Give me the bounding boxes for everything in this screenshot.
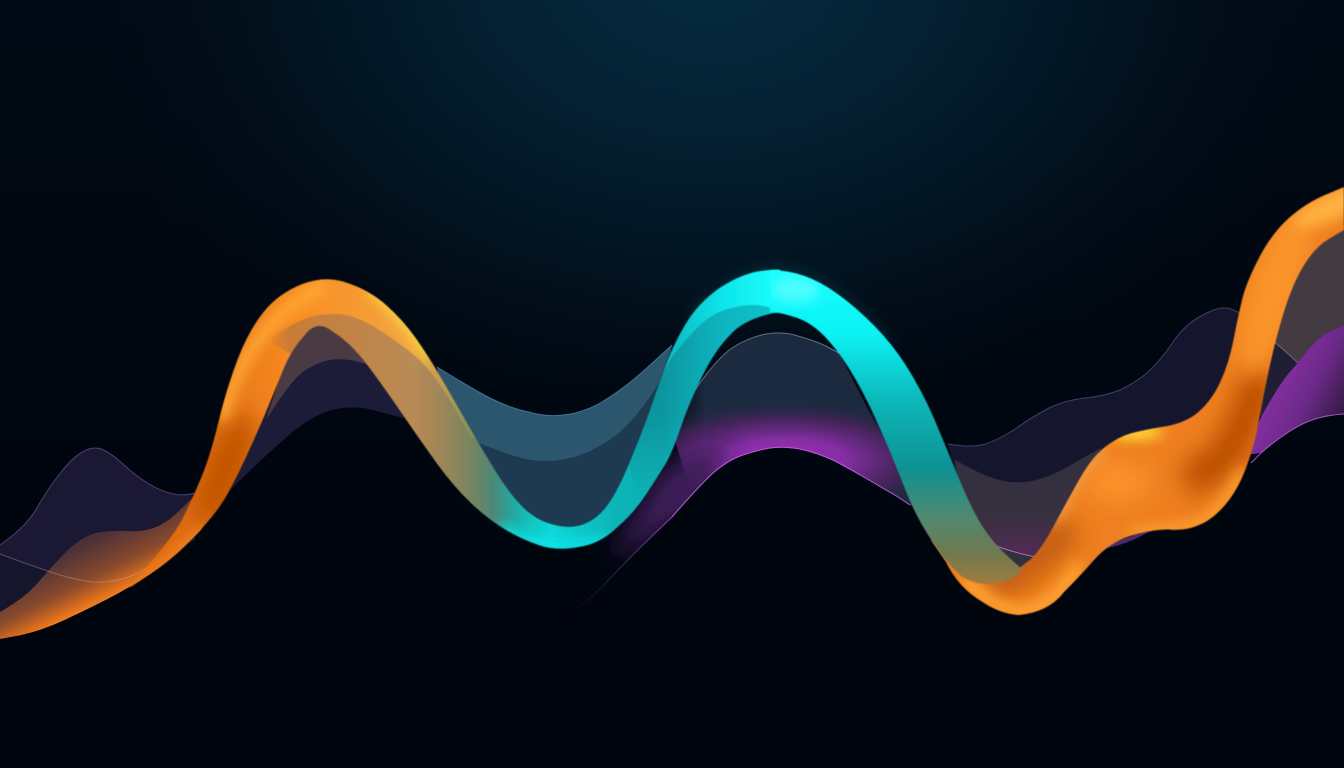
blue translucent trough, lower bbox=[437, 345, 672, 535]
right dark translucent wave bbox=[948, 308, 1257, 500]
shading: dark orange on left leg bbox=[181, 404, 269, 536]
blue translucent trough, upper band bbox=[437, 345, 672, 461]
shading: yellow shoulder highlight bbox=[1107, 424, 1163, 440]
shading: yellow highlight at peak bbox=[370, 285, 432, 358]
central purple edge line bbox=[672, 447, 910, 517]
shading: central orange bbox=[1084, 462, 1152, 502]
central arch thin outline bbox=[680, 333, 839, 415]
blue trough edge line bbox=[437, 345, 672, 416]
shading: tan left edge bbox=[1055, 448, 1105, 520]
right navy wedge bbox=[1255, 335, 1298, 417]
shading: top corner glow bbox=[1292, 187, 1344, 232]
thin line across left tail bbox=[0, 554, 150, 582]
highlight at teal crest bbox=[771, 278, 819, 302]
navy arch behind orange peak bbox=[230, 320, 412, 490]
overlay: translucent band across arch bbox=[270, 314, 528, 536]
overlay: darker inner band of teal arch bbox=[630, 304, 777, 478]
small purple sliver under orange bbox=[1098, 526, 1160, 549]
central navy arch bbox=[672, 333, 920, 517]
shading: dark lower fold bbox=[990, 525, 1070, 588]
orange ribbon, right section bbox=[931, 173, 1344, 615]
wedge edge line bbox=[1272, 340, 1298, 363]
right purple band bbox=[1245, 325, 1344, 463]
left translucent orange ribbon tail bbox=[0, 497, 215, 639]
central purple glow band bbox=[672, 385, 925, 505]
left translucent wave with purple outline bbox=[0, 448, 195, 620]
shading: upper arm glow bbox=[1235, 212, 1314, 389]
right lower grey-purple panel bbox=[955, 448, 1101, 575]
shading: cyan trough rim bbox=[500, 528, 610, 547]
right grey-brown panel bbox=[1262, 225, 1344, 420]
brown arch behind orange peak bbox=[266, 318, 375, 420]
shading: lower edge glow of tail bbox=[130, 528, 205, 590]
shading: bottom rim bbox=[965, 565, 1080, 611]
main ribbon: right leg of teal arch bbox=[770, 270, 1023, 584]
main ribbon: orange to teal to cyan bbox=[129, 270, 783, 590]
shading: dark streak bbox=[1185, 370, 1262, 480]
cyan glow around teal crest bbox=[690, 270, 890, 345]
fading purple tail under teal trough bbox=[570, 440, 730, 613]
shading: lower right rim bbox=[1130, 470, 1242, 533]
shading: orange arch glow bbox=[222, 285, 325, 420]
